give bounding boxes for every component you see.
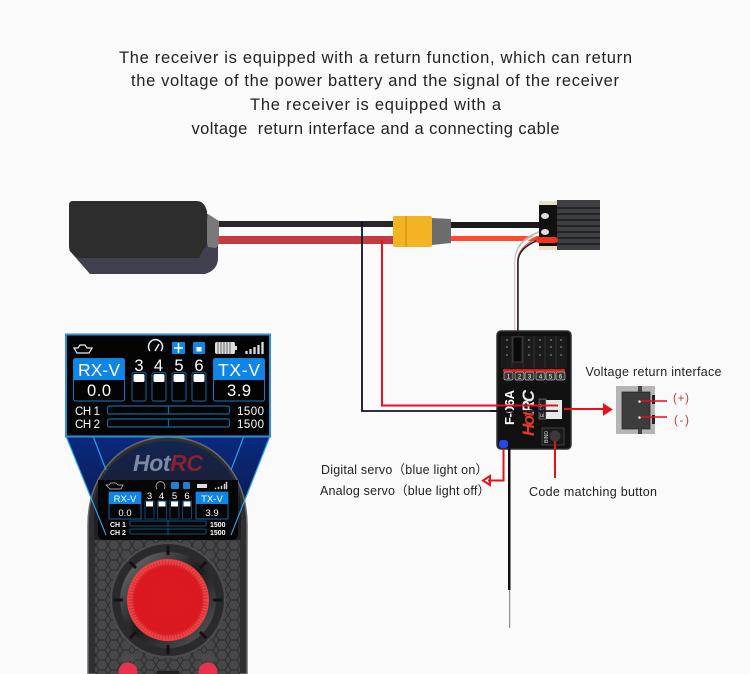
icon: receiver (497, 331, 571, 449)
small screen: 3 (147, 491, 152, 502)
channel labels: 2 (518, 374, 522, 380)
small screen: 1500 (210, 530, 226, 537)
small screen: 3.9 (205, 508, 219, 519)
model label: F-06A (502, 389, 517, 425)
icon: ESC (536, 200, 600, 250)
wiring: connector to ESC cables (451, 222, 547, 241)
heading text: the voltage of the power battery and the signal of the receiver (131, 72, 620, 90)
heading text: The receiver is equipped with a (250, 96, 502, 114)
heading text (119, 49, 632, 138)
channel sliders 3-6: 3 (134, 357, 144, 375)
channel bars: 1500 (237, 406, 264, 418)
voltage port: E.T.V (540, 404, 546, 417)
icon: servo cable (515, 230, 548, 334)
label: plus and minus: (+) (673, 393, 689, 405)
channel labels: 6 (559, 374, 563, 380)
icon: XT connector (393, 216, 451, 247)
status LED (499, 440, 508, 448)
wiring: black return wire overlay on receiver (490, 410, 558, 412)
bind button: BIND (544, 431, 550, 443)
heading text: The receiver is equipped with a return function, which can return (119, 49, 632, 67)
small screen: 0.0 (118, 508, 132, 519)
channel labels: 3 (528, 374, 532, 380)
RX-V readout: RX-V (78, 360, 120, 380)
TX-V readout (214, 358, 264, 401)
channel labels (503, 369, 565, 380)
label: servo modes: Analog servo（blue light off） (320, 484, 490, 498)
channel bars: CH 1 (75, 406, 100, 418)
channel labels: 4 (539, 374, 543, 380)
icon: battery (69, 201, 224, 274)
label: plus and minus (673, 393, 689, 427)
label: code matching button: Code matching button (529, 485, 657, 499)
wiring: black return wire (362, 222, 558, 411)
RX-V readout: 0.0 (87, 382, 111, 400)
channel sliders 3-6: 6 (194, 357, 204, 375)
wiring: battery to connector cables (215, 221, 395, 244)
brand label: HotRC (519, 389, 538, 436)
arrow: code matching button (554, 441, 556, 478)
up and left buttons (118, 654, 218, 674)
pin header (501, 336, 567, 368)
label: plus and minus: (-) (674, 415, 689, 427)
label: servo modes: Digital servo（blue light on） (321, 463, 488, 477)
knob (111, 543, 225, 657)
label: servo modes (320, 463, 490, 498)
small screen: 5 (172, 491, 177, 502)
label: voltage return interface: Voltage return interface (586, 365, 722, 379)
small screen: 1500 (210, 522, 226, 529)
channel sliders 3-6: 5 (174, 357, 184, 375)
channel sliders 3-6: 4 (154, 357, 163, 375)
small screen: CH 2 (110, 530, 126, 537)
small screen: 6 (184, 491, 190, 502)
small screen: 4 (159, 491, 164, 502)
wiring: red return wire (382, 240, 558, 406)
small screen: RX-V (114, 494, 137, 505)
small screen: TX-V (201, 494, 223, 505)
status icons (74, 340, 262, 354)
arrow: to voltage return interface (564, 405, 611, 414)
RX-V readout (74, 358, 124, 401)
handset body (88, 437, 247, 674)
blue zoom beam fill (66, 436, 270, 535)
remote control (66, 334, 270, 674)
blue zoom beam edges (66, 436, 270, 535)
icon: return connector (616, 386, 667, 434)
channel labels: 1 (507, 374, 511, 380)
small screen: CH 1 (110, 522, 126, 529)
heading text: voltage return interface and a connecting cable (192, 120, 560, 138)
arrow: servo mode (483, 449, 504, 485)
channel sliders 3-6 (132, 357, 206, 401)
large screen (66, 334, 270, 436)
channel bars: CH 2 (75, 419, 100, 431)
channel bars (75, 406, 264, 431)
channel bars: 1500 (237, 419, 264, 431)
small screen (98, 480, 238, 540)
handset top glass (94, 441, 241, 540)
TX-V readout: TX-V (218, 360, 260, 380)
TX-V readout: 3.9 (227, 382, 251, 400)
logo: HotRC: HotRC (133, 450, 203, 476)
antenna (508, 433, 510, 628)
channel labels: 5 (549, 374, 553, 380)
hexagon panel (95, 540, 240, 674)
